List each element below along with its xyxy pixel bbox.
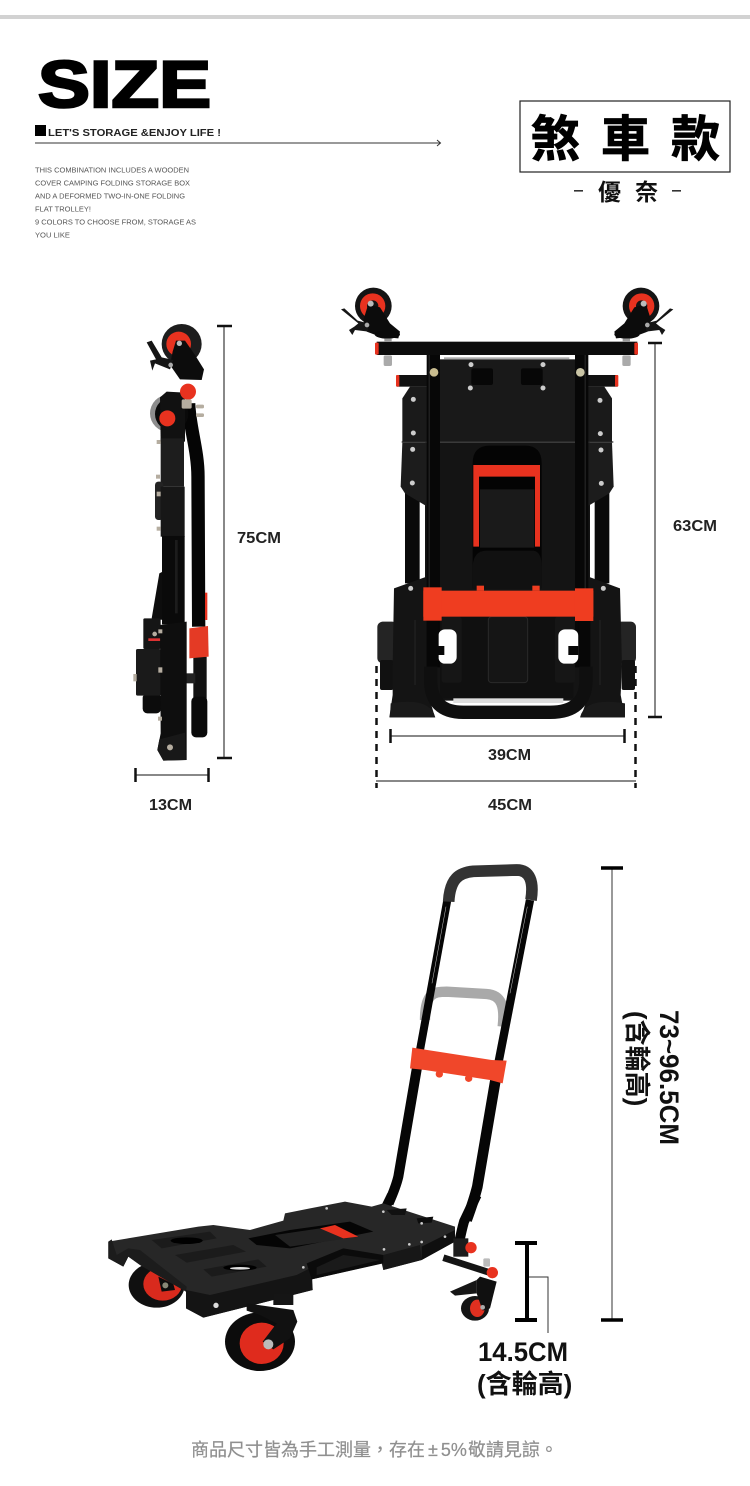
base plate: [377, 577, 636, 717]
grip: [449, 870, 532, 902]
back tube: [189, 403, 199, 627]
right caster and axle: [443, 1238, 498, 1321]
subheading: variant name: 奈: [635, 179, 658, 205]
subheading: variant name: [574, 179, 681, 205]
product photo: folded trolley front view: [341, 288, 673, 717]
label: wheel height value: 14.5CM: [478, 1337, 568, 1367]
heading: model name: 煞: [531, 113, 580, 167]
dimension: outer width 45CM: [376, 666, 636, 814]
left lobe and front face: [108, 1239, 187, 1292]
label: height value: 73~96.5CM: [654, 1010, 684, 1145]
upper body block: [161, 438, 184, 487]
platform: [108, 1195, 498, 1371]
diagonal strut and side wheel: [152, 572, 163, 620]
dimension: handle height 73~96.5CM: [601, 868, 684, 1321]
dimension: inner width 39CM: [390, 729, 625, 764]
red crossbar: [410, 1048, 507, 1083]
arrow: header rule: [35, 140, 440, 146]
dimension: wheel height 14.5CM: [477, 1243, 572, 1399]
dimension: folded depth 13CM: 13CM: [149, 797, 192, 814]
dimension: folded height 75CM: 75CM: [237, 530, 281, 547]
tube feet: [459, 1195, 477, 1242]
dimension: outer width 45CM: 45CM: [488, 797, 532, 814]
tubes left and right: [427, 351, 588, 667]
text block: description: AND A DEFORMED TWO-IN-ONE FOLDING: [35, 192, 185, 200]
text block: description: FLAT TROLLEY!: [35, 204, 91, 214]
platform body: [108, 1202, 455, 1318]
right block and arch: [383, 1245, 422, 1270]
recesses: [152, 1232, 217, 1248]
icon: black square bullet: [35, 125, 46, 136]
top caster: [147, 324, 204, 380]
product photo: folded trolley side view: [133, 324, 209, 761]
text block: description: THIS COMBINATION INCLUDES A WOODEN: [35, 166, 189, 174]
lower grip handle: [431, 667, 586, 712]
ghost lowered handle: [425, 992, 503, 1027]
dimension: folded depth 13CM: [135, 768, 209, 814]
gray folded wheel: [150, 395, 187, 432]
label: includes wheel height: (含輪高): [622, 1011, 652, 1106]
red pivot caps: [180, 384, 196, 400]
subheading: variant name: 優: [598, 179, 621, 205]
header: SIZE title block: [35, 47, 440, 240]
bolts and slots: [408, 362, 606, 591]
white cut-outs in base: [427, 620, 590, 667]
dimension: folded height 75CM: [217, 326, 281, 758]
bolts: [133, 399, 204, 750]
handle tubes: [420, 900, 447, 1050]
dimension: height 63CM: [648, 343, 717, 717]
label: includes wheel height: (含輪高): [477, 1369, 572, 1399]
top caster: left: [341, 288, 400, 366]
side structure: right: [584, 375, 618, 583]
heading: model name: 車: [601, 113, 650, 167]
upper and middle panels: [402, 357, 613, 589]
dimension: height 63CM: 63CM: [673, 518, 717, 535]
text block: description: 9 COLORS TO CHOOSE FROM, STORAGE AS: [35, 218, 196, 226]
center window with red handle: [473, 446, 542, 588]
top caster: right: [614, 288, 673, 366]
text block: description: COVER CAMPING FOLDING STORAGE BOX: [35, 178, 190, 188]
center window: [248, 1222, 373, 1248]
upper handle: [389, 870, 532, 1220]
title: SIZE: [38, 47, 211, 121]
side structure: left: [396, 375, 430, 583]
text block: description: [35, 166, 196, 240]
red sleeve: [189, 626, 209, 658]
heading: model name: [531, 113, 720, 167]
lower body column: [162, 536, 185, 624]
rivets: [213, 1207, 446, 1308]
text block: description: YOU LIKE: [35, 230, 70, 240]
tagline: LET'S STORAGE &ENJOY LIFE !: [48, 128, 221, 139]
product photo: opened trolley: [108, 870, 532, 1371]
panel: model name box: [520, 101, 730, 172]
front wheel: [225, 1293, 297, 1371]
footnote: 商品尺寸皆為手工測量，存在±5%敬請見諒。: [191, 1440, 558, 1460]
red crossbar: [423, 586, 593, 621]
rear wheel: [129, 1262, 185, 1308]
heading: model name: 款: [671, 113, 720, 167]
top cross bar: [375, 342, 638, 355]
dimension: inner width 39CM: 39CM: [488, 747, 531, 764]
